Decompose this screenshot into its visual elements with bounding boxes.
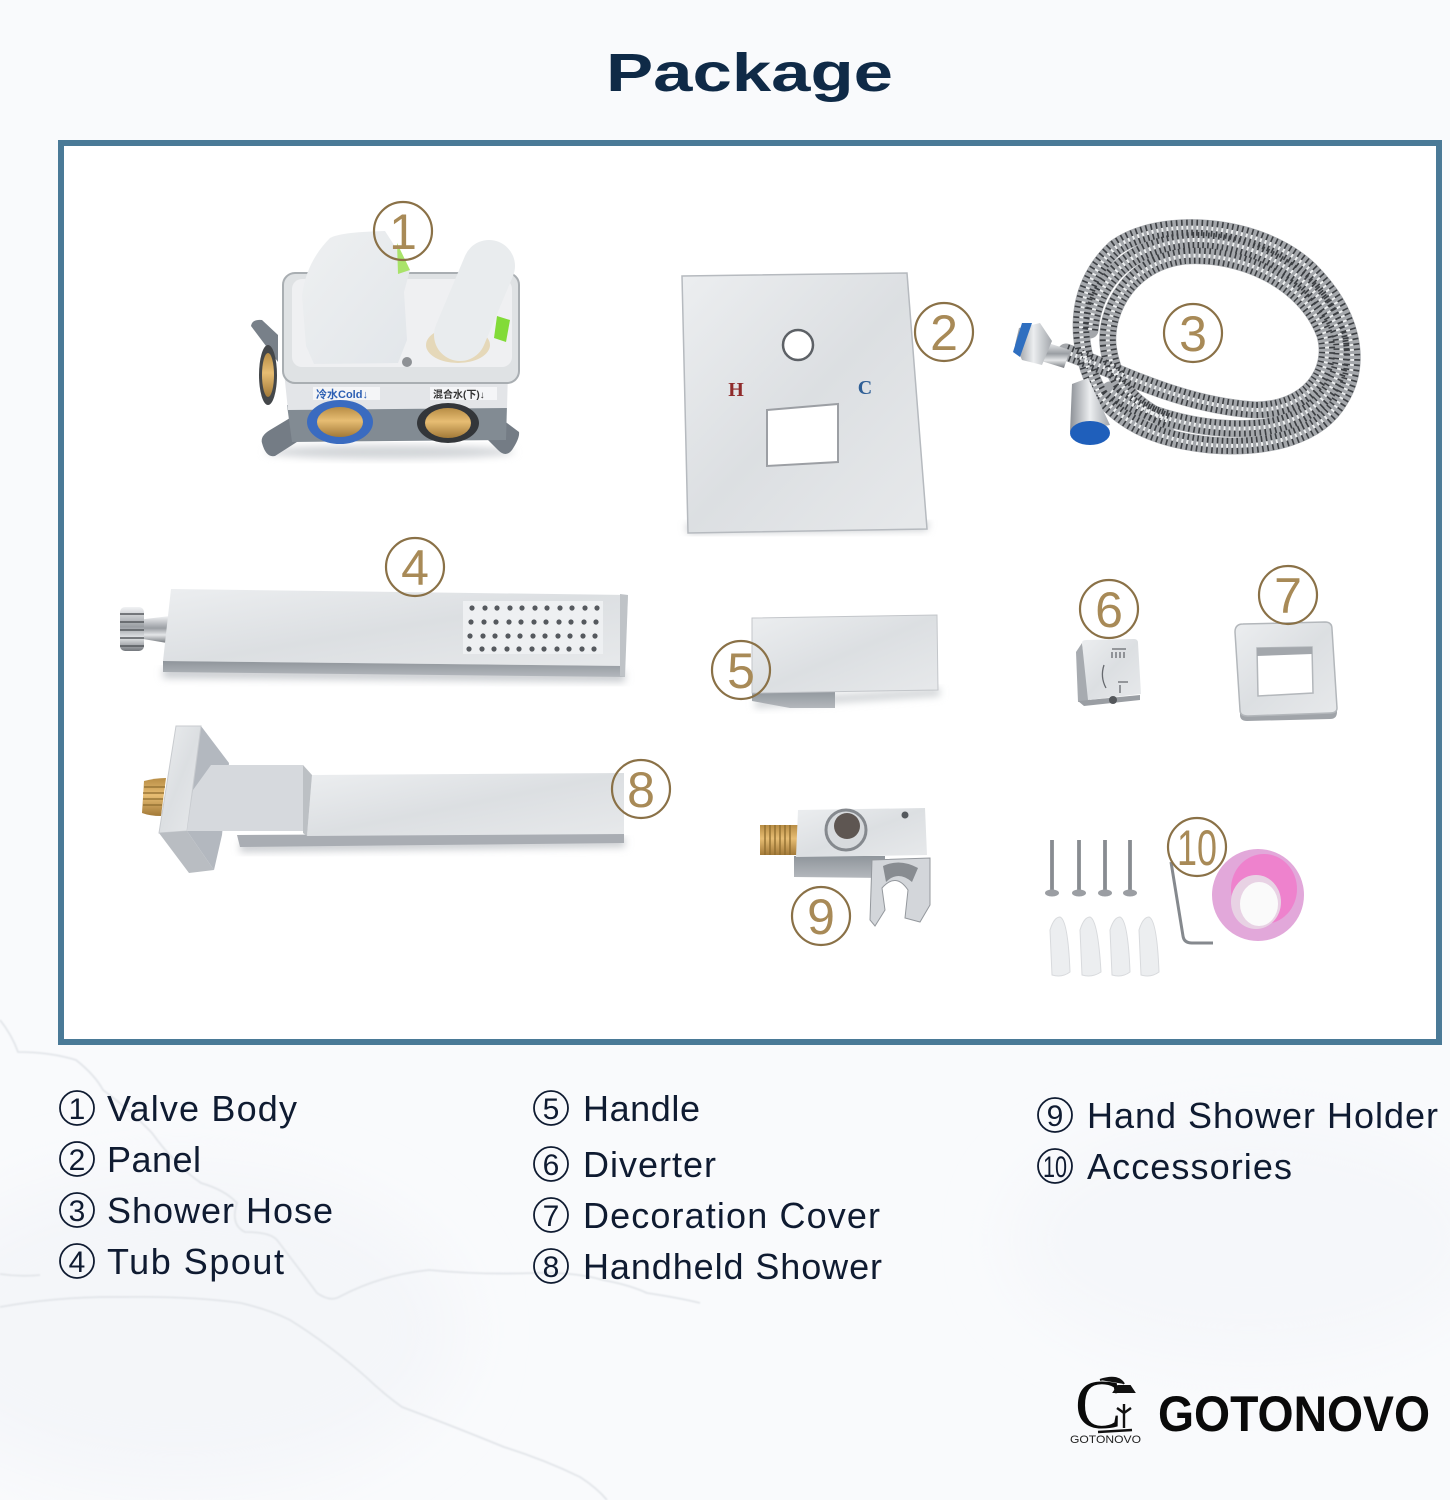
number callouts: 3 — [1179, 306, 1207, 362]
legend column 3: Accessories — [1087, 1146, 1292, 1187]
legend column 2: Handheld Shower — [583, 1246, 882, 1287]
item 8: handheld shower arm — [142, 726, 625, 873]
legend column 3: 9 — [1047, 1100, 1063, 1133]
item 1: valve body: 混合水(下)↓ — [433, 388, 485, 401]
number callouts: 8 — [627, 762, 655, 818]
legend column 1: Tub Spout — [107, 1241, 284, 1282]
number callouts — [374, 202, 1317, 945]
legend column 1: 2 — [69, 1144, 85, 1177]
number callouts: 6 — [1095, 582, 1123, 638]
number callouts: 4 — [401, 540, 429, 596]
legend column 2: 5 — [543, 1093, 559, 1126]
legend column 2: 8 — [543, 1251, 559, 1284]
legend column 1: Valve Body — [107, 1088, 297, 1129]
logo: GOTONOVO: GOTONOVO — [1158, 1386, 1430, 1442]
number callouts: 5 — [727, 643, 755, 699]
item 9: hand shower holder — [760, 808, 930, 926]
item 2: panel: H — [728, 379, 744, 401]
item 2: panel: C — [858, 377, 872, 399]
logo: GOTONOVO — [1070, 1367, 1430, 1446]
legend column 3 — [1038, 1095, 1438, 1187]
legend column 3: 10 — [1043, 1151, 1067, 1184]
item 1: valve body: 冷水Cold↓ — [316, 387, 368, 401]
legend column 1: 1 — [69, 1093, 85, 1126]
legend column 1: 3 — [69, 1195, 85, 1228]
legend column 2: Diverter — [583, 1144, 716, 1185]
panel: package contents — [61, 143, 1439, 1042]
number callouts: 2 — [930, 305, 958, 361]
legend column 1 — [60, 1088, 333, 1282]
item 2: panel — [682, 273, 929, 533]
number callouts: 9 — [807, 889, 835, 945]
item 10: accessories — [1045, 840, 1304, 976]
legend column 2: 7 — [543, 1200, 559, 1233]
legend column 1: Shower Hose — [107, 1190, 333, 1231]
legend column 1: 4 — [69, 1246, 85, 1279]
logo: GOTONOVO: GOTONOVO — [1070, 1434, 1141, 1446]
legend column 2: Handle — [583, 1088, 700, 1129]
legend column 2 — [534, 1088, 882, 1287]
item 4: tub spout — [120, 589, 628, 682]
item 1: valve body — [251, 231, 519, 459]
item 7: decoration cover — [1235, 622, 1337, 721]
title: Package — [606, 43, 893, 103]
item 6: diverter — [1076, 639, 1141, 706]
item 5: handle — [752, 615, 940, 708]
item 3: shower hose — [1013, 228, 1352, 446]
number callouts: 10 — [1177, 820, 1217, 876]
legend column 3: Hand Shower Holder — [1087, 1095, 1438, 1136]
logo: GOTONOVO: C — [1075, 1367, 1122, 1444]
legend column 2: 6 — [543, 1149, 559, 1182]
legend column 2: Decoration Cover — [583, 1195, 880, 1236]
legend column 1: Panel — [107, 1139, 201, 1180]
number callouts: 1 — [389, 204, 417, 260]
number callouts: 7 — [1274, 568, 1302, 624]
